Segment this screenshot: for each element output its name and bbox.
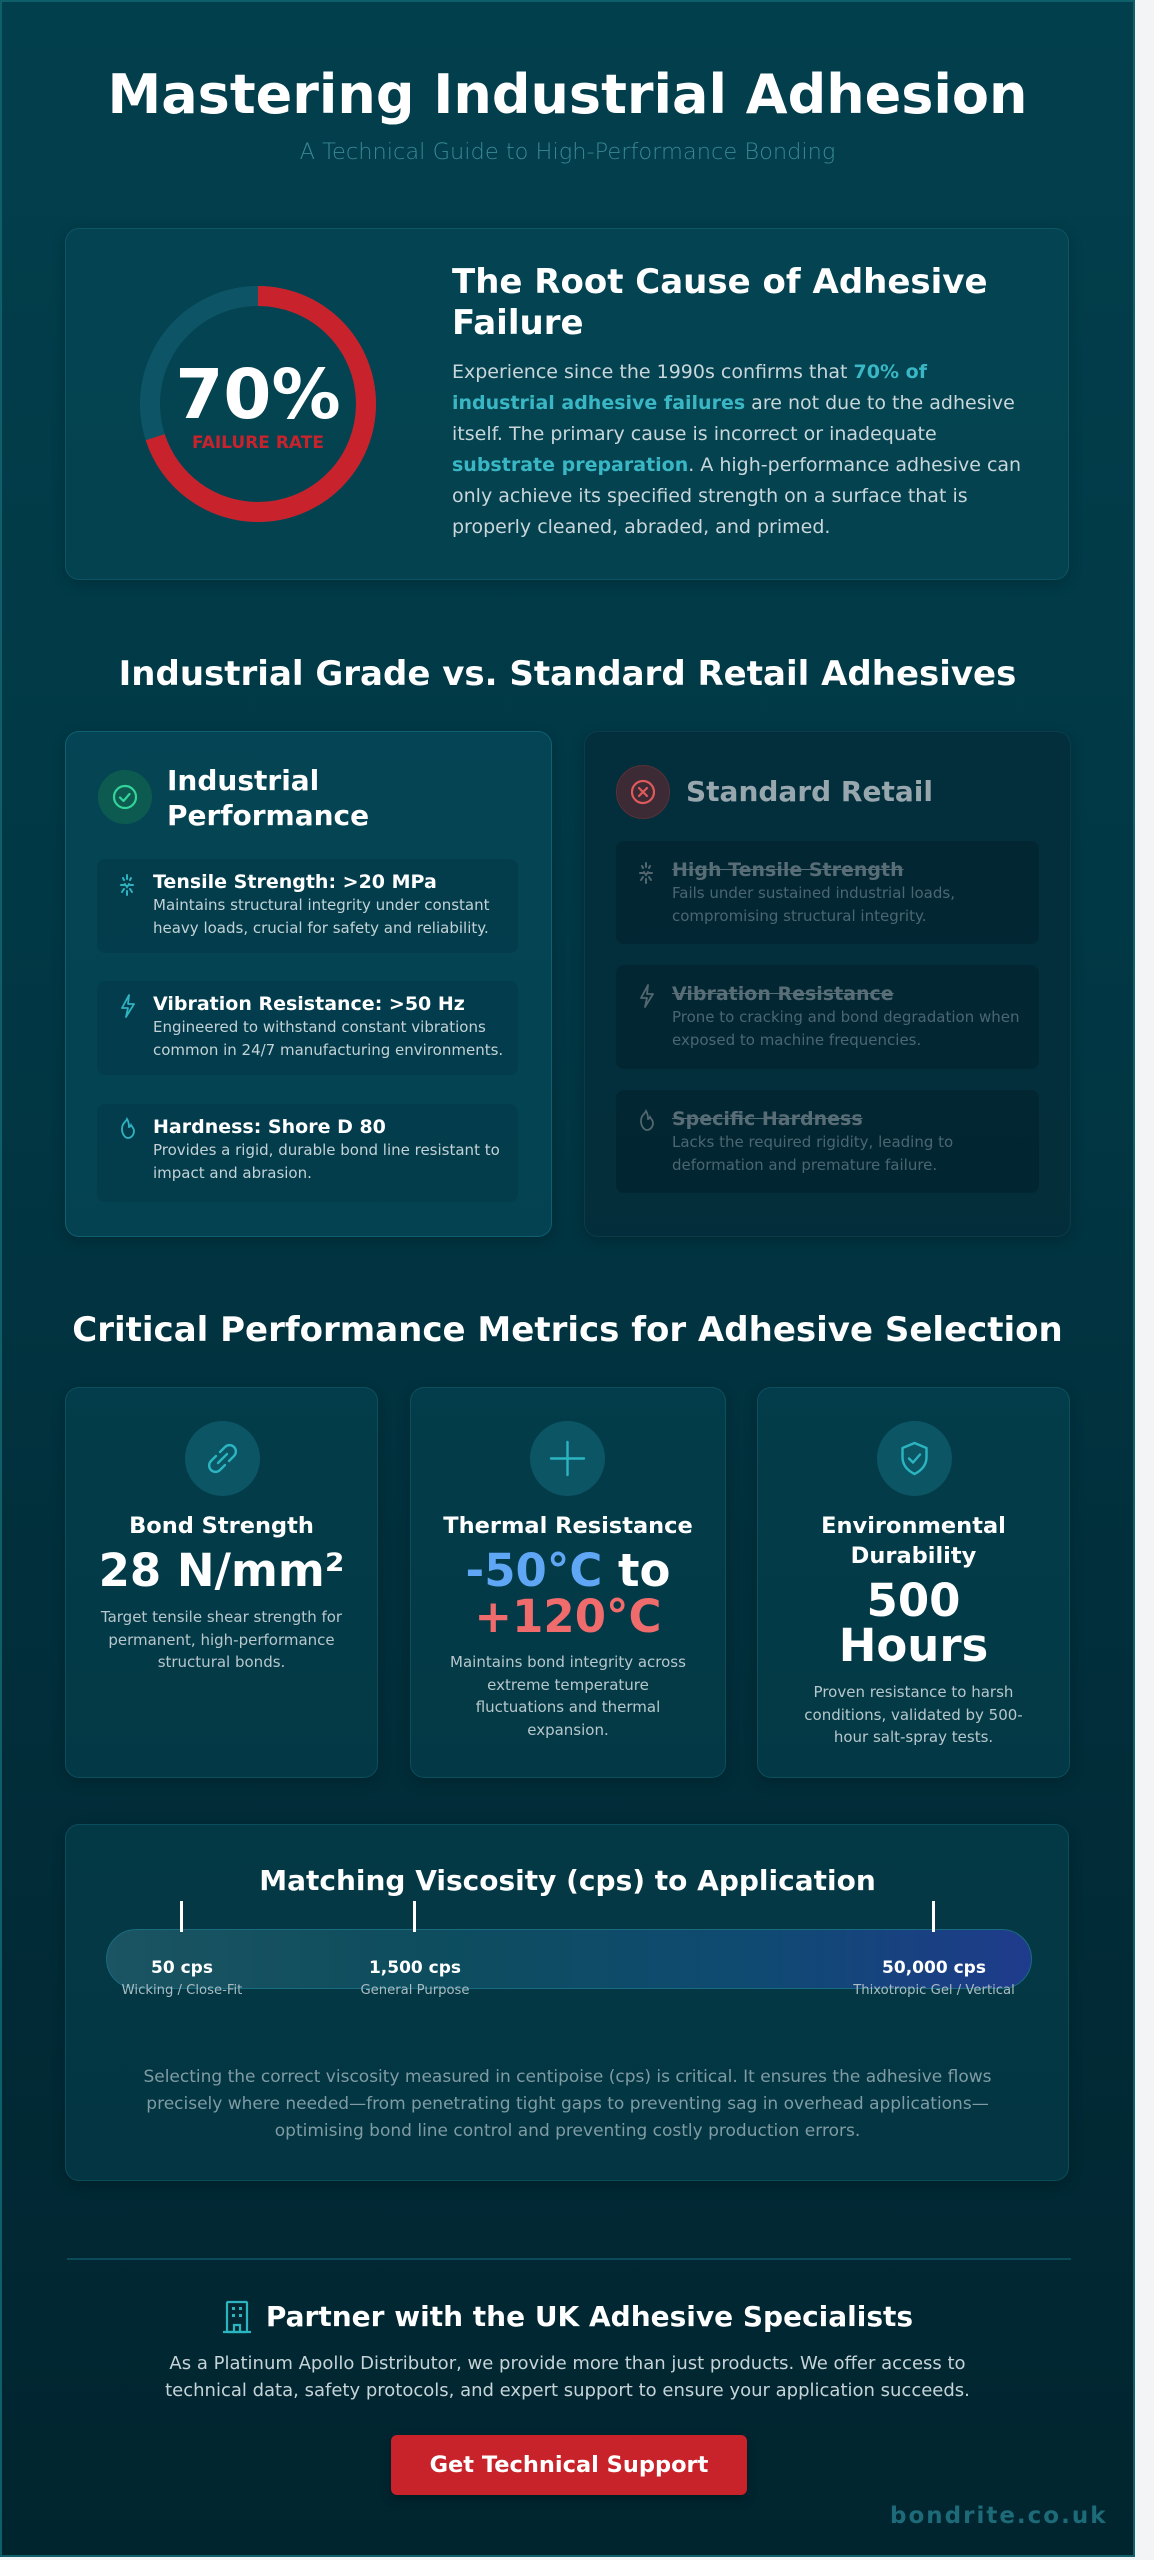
subtitle: A Technical Guide to High-Performance Bonding	[300, 139, 835, 165]
icon: link	[185, 1421, 260, 1496]
item: tensile strength: Maintains structural integrity under constant	[153, 896, 490, 914]
item: hardness	[97, 1104, 518, 1202]
panel: thermal resistance	[410, 1387, 726, 1778]
icon: hardness	[121, 1117, 135, 1139]
donut chart: 70% failure rate: FAILURE RATE	[192, 433, 324, 453]
item: vibration resistance (struck)	[616, 965, 1039, 1069]
title: environmental durability: Environmental	[821, 1513, 1006, 1539]
chart: viscosity scale bar	[106, 1901, 1032, 1998]
item: high tensile strength (struck): Fails under sustained industrial loads,	[672, 884, 955, 902]
chart: viscosity scale bar: Wicking / Close-Fit	[122, 1983, 242, 1998]
value: 500 hours: Hours	[839, 1619, 988, 1672]
text: partner description: As a Platinum Apollo Distributor, we provide more than just products. We offer access to technical data, safety protocols, and expert support to ensure your application succeeds.	[165, 2353, 970, 2401]
icon: plus	[530, 1421, 605, 1496]
text: viscosity explanation: Selecting the correct viscosity measured in centipoise (cps) is critical. It ensures the adhesive flows precisely where needed—from penetrating tight gaps to preventing sag in overhead applications—optimising bond line control and preventing costly production errors.	[143, 2067, 992, 2141]
item: vibration resistance: Engineered to withstand constant vibrations	[153, 1018, 486, 1036]
title: bond strength: Bond Strength	[129, 1513, 314, 1539]
item: vibration resistance: common in 24/7 manufacturing environments.	[153, 1041, 503, 1059]
value: temperature range	[466, 1544, 670, 1643]
panel: bond strength	[65, 1387, 378, 1778]
value: 500 hours	[839, 1574, 988, 1672]
item: tensile strength	[97, 859, 518, 953]
heading: standard retail: Standard Retail	[686, 775, 933, 808]
heading: industrial performance: Performance	[167, 799, 369, 832]
item: vibration resistance	[97, 981, 518, 1075]
item: high tensile strength (struck)	[616, 841, 1039, 944]
label: 50 cps: 50 cps	[151, 1958, 213, 1978]
chart: viscosity scale bar: Thixotropic Gel / Vertical	[853, 1983, 1015, 1998]
chart: viscosity scale bar: General Purpose	[360, 1983, 470, 1998]
value: 500 hours: 500	[867, 1574, 960, 1627]
item: vibration resistance (struck): Prone to cracking and bond degradation when	[672, 1008, 1019, 1026]
panel: root cause	[65, 228, 1069, 580]
value: temperature range: -50°C to	[466, 1544, 670, 1597]
text: bond strength desc: Target tensile shear strength for permanent, high-performance structural bonds.	[101, 1608, 342, 1671]
text block: root cause explanation: Experience since the 1990s confirms that 70% of industrial adhesive failures are not due to the adhesive itself. The primary cause is incorrect or inadequate substrate preparation. A high-performance adhesive can only achieve its specified strength on a surface that is properly cleaned, abraded, and primed.	[452, 361, 1021, 538]
item: tensile strength: Tensile Strength: >20 MPa	[153, 871, 437, 893]
item: specific hardness (struck): deformation and premature failure.	[672, 1156, 937, 1174]
item: hardness: impact and abrasion.	[153, 1164, 312, 1182]
item: vibration resistance (struck): Vibration Resistance	[672, 983, 894, 1005]
label: 50000 cps: 50,000 cps	[882, 1958, 986, 1978]
item: vibration resistance: Vibration Resistance: >50 Hz	[153, 993, 465, 1015]
text: durability desc: Proven resistance to harsh conditions, validated by 500-hour salt-spray tests.	[804, 1683, 1023, 1746]
donut chart: 70% failure rate: 70%	[175, 355, 341, 435]
button: get technical support: Get Technical Support	[430, 2452, 708, 2478]
item: specific hardness (struck): Specific Hardness	[672, 1108, 863, 1130]
panel: viscosity	[65, 1824, 1069, 2181]
title: environmental durability: Durability	[851, 1543, 976, 1569]
item: hardness: Provides a rigid, durable bond line resistant to	[153, 1141, 500, 1159]
heading: industrial performance	[167, 764, 369, 832]
icon: tensile	[120, 874, 134, 896]
icon: check circle	[98, 770, 152, 824]
panel: environmental durability	[757, 1387, 1070, 1778]
value: temperature range: +120°C	[474, 1590, 662, 1643]
title: thermal resistance: Thermal Resistance	[443, 1513, 693, 1539]
icon: shield	[877, 1421, 952, 1496]
heading: root cause: The Root Cause of Adhesive Failure	[452, 262, 988, 343]
icon: building	[223, 2300, 251, 2334]
button: get technical support	[391, 2435, 747, 2495]
item: high tensile strength (struck): High Tensile Strength	[672, 859, 904, 881]
heading: viscosity: Matching Viscosity (cps) to Application	[259, 1864, 876, 1897]
item: tensile strength: heavy loads, crucial for safety and reliability.	[153, 919, 489, 937]
heading: critical metrics: Critical Performance Metrics for Adhesive Selection	[72, 1310, 1063, 1350]
text: thermal desc: Maintains bond integrity across extreme temperature fluctuations and thermal expansion.	[450, 1653, 686, 1738]
heading: partner: Partner with the UK Adhesive Specialists	[266, 2300, 913, 2333]
item: high tensile strength (struck): compromising structural integrity.	[672, 907, 926, 925]
icon: bolt	[640, 984, 654, 1008]
footer: website: bondrite.co.uk	[890, 2503, 1108, 2529]
title: Mastering Industrial Adhesion	[108, 63, 1027, 126]
icon: hardness	[640, 1109, 654, 1131]
heading: industrial performance: Industrial	[167, 764, 319, 797]
item: specific hardness (struck): Lacks the required rigidity, leading to	[672, 1133, 953, 1151]
value: 28 N/mm2: 28 N/mm²	[99, 1544, 344, 1597]
label: 1500 cps: 1,500 cps	[369, 1958, 461, 1978]
item: vibration resistance (struck): exposed to machine frequencies.	[672, 1031, 921, 1049]
icon: tensile	[639, 862, 653, 884]
heading: industrial vs retail: Industrial Grade vs. Standard Retail Adhesives	[119, 654, 1016, 694]
icon: x circle	[616, 765, 670, 819]
item: specific hardness (struck)	[616, 1090, 1039, 1193]
panel: standard retail	[584, 731, 1071, 1237]
title: environmental durability	[821, 1513, 1006, 1569]
panel: industrial performance	[65, 731, 552, 1237]
donut chart: 70% failure rate	[140, 286, 376, 522]
item: hardness: Hardness: Shore D 80	[153, 1116, 386, 1138]
icon: bolt	[121, 994, 135, 1018]
